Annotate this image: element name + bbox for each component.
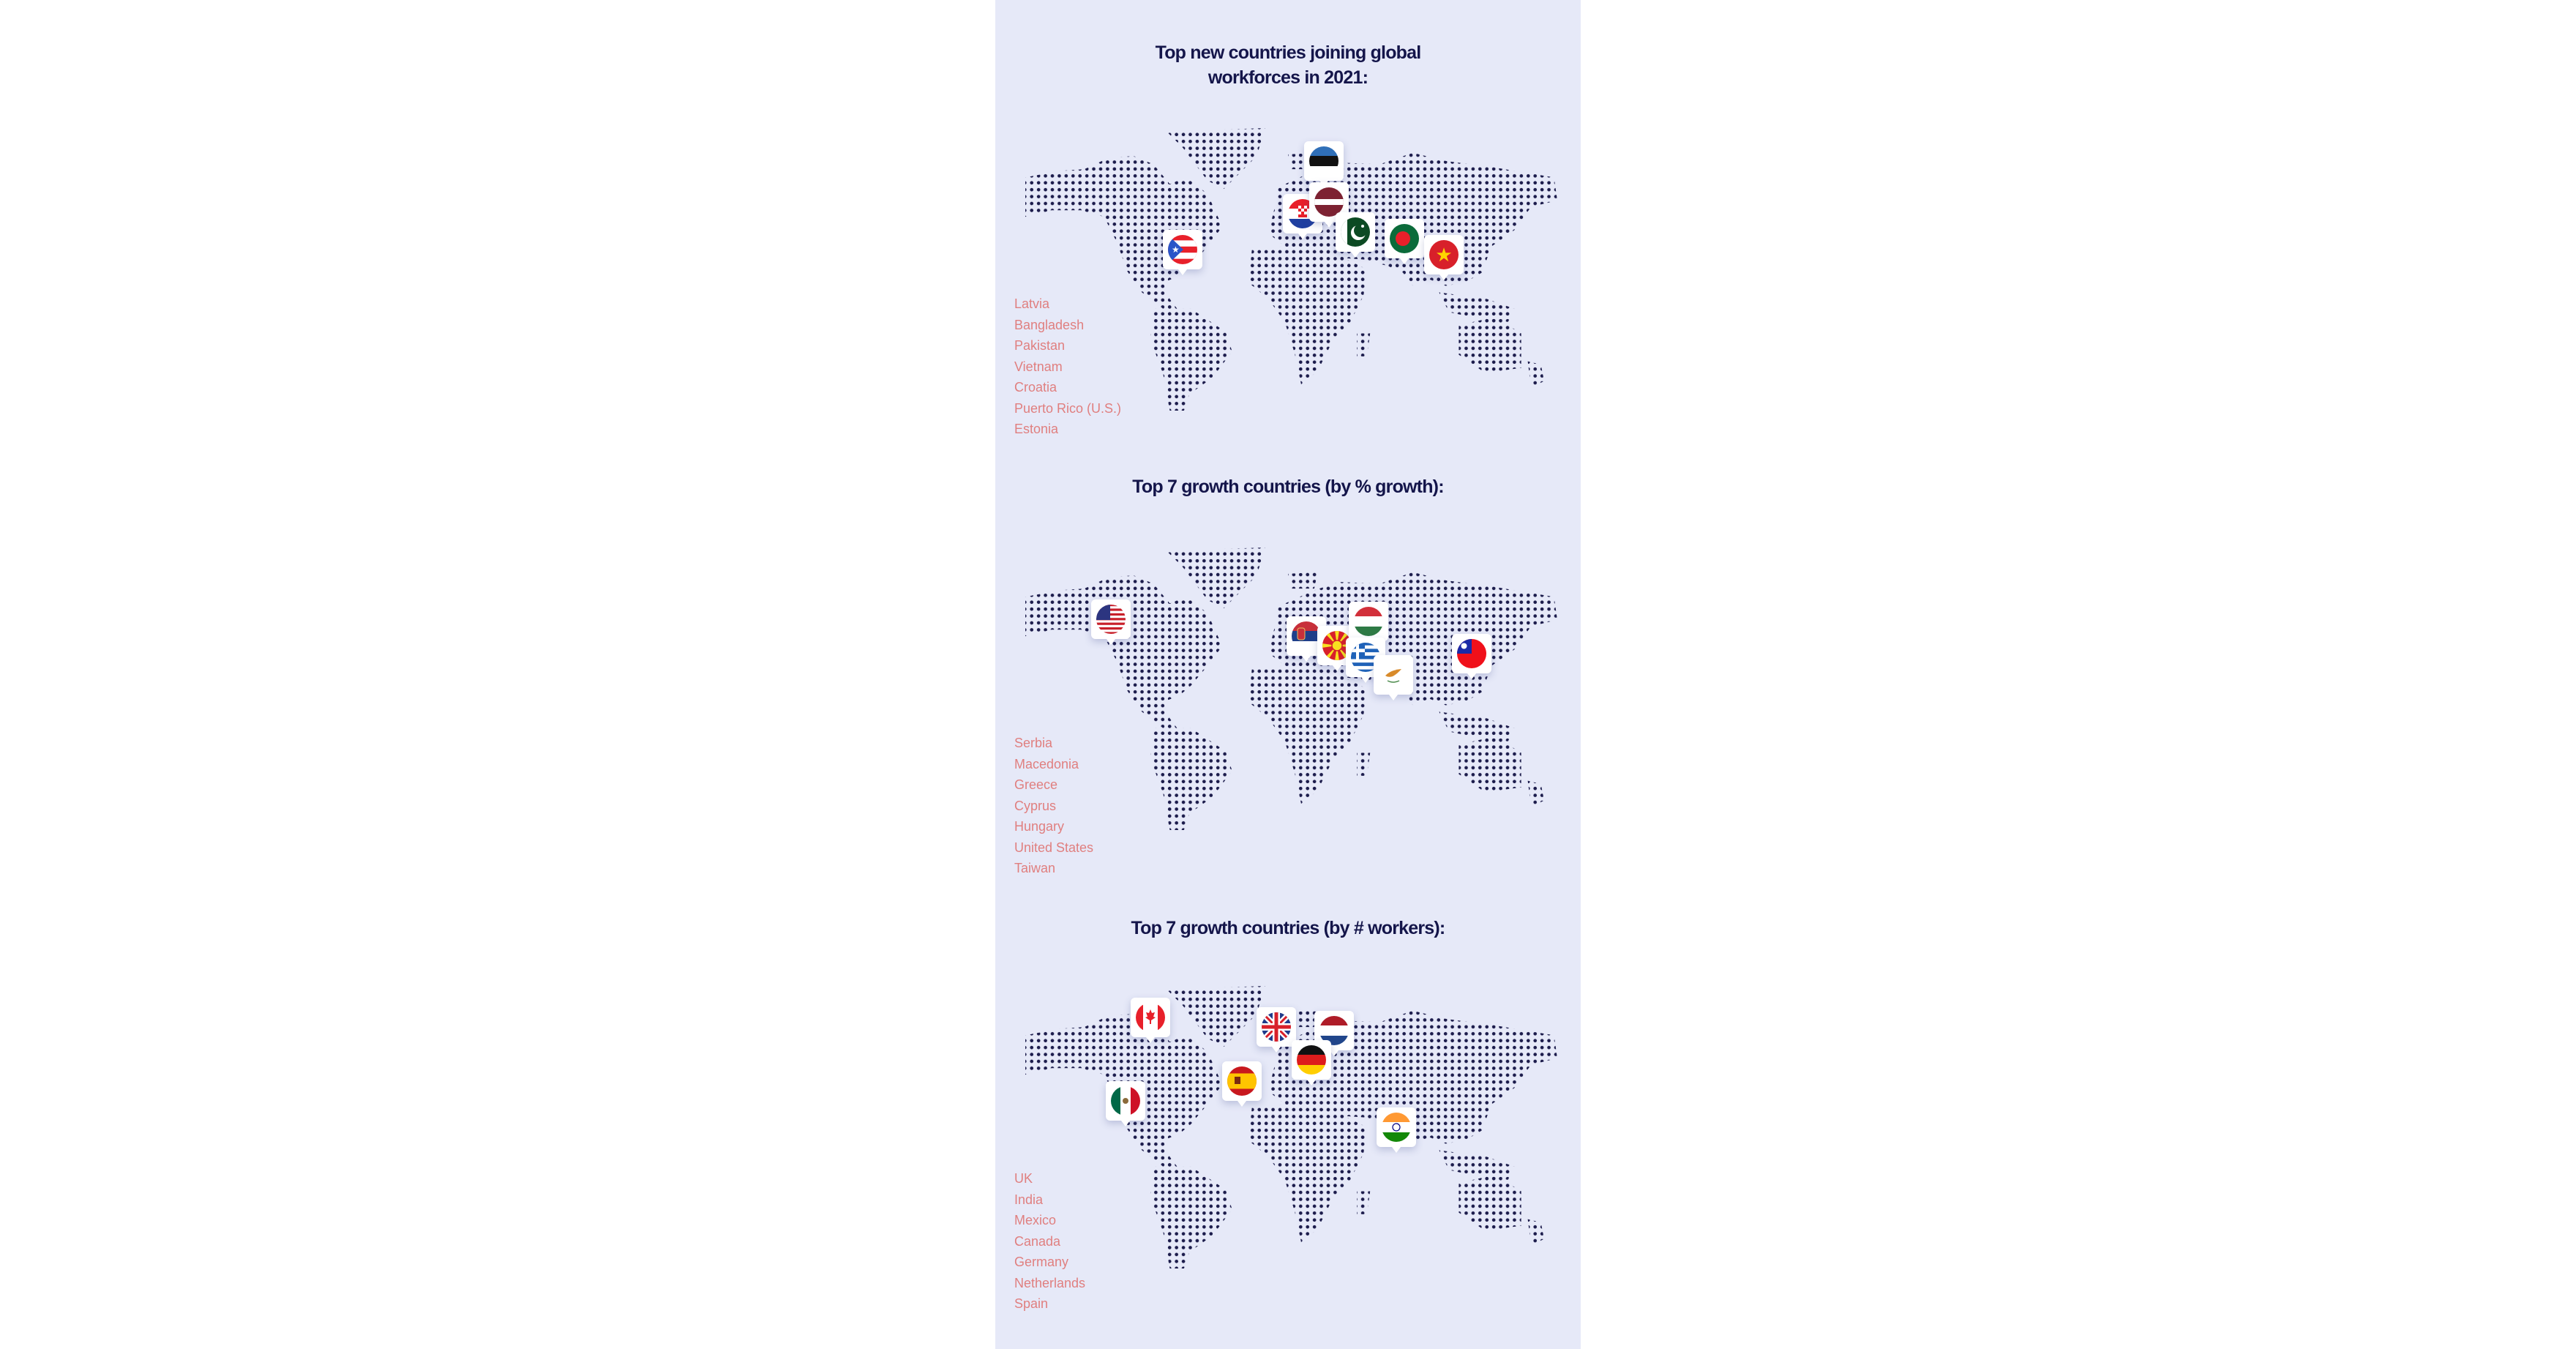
- list: section 3 countries: Germany: [1014, 1255, 1068, 1269]
- list: section 1 countries: Vietnam: [1014, 359, 1063, 373]
- flag: Puerto Rico: [1163, 230, 1202, 269]
- list: section 3 countries: Canada: [1014, 1234, 1060, 1249]
- list: section 2 countries: United States: [1014, 840, 1093, 855]
- list: section 2 countries: Cyprus: [1014, 798, 1056, 812]
- map: section 2: [1025, 548, 1557, 830]
- list: section 1 countries: Bangladesh: [1014, 318, 1084, 332]
- flag: Serbia: [1287, 616, 1326, 656]
- flag: UK: [1257, 1007, 1296, 1047]
- map: section 3: [1025, 986, 1557, 1268]
- flag: Cyprus: [1374, 655, 1413, 695]
- list: section 1 countries: [1014, 296, 1121, 436]
- list: section 2 countries: Greece: [1014, 777, 1057, 792]
- title: section 1: Top new countries joining global: [1156, 42, 1420, 63]
- flag: Taiwan: [1452, 634, 1491, 673]
- list: section 1 countries: Pakistan: [1014, 338, 1065, 353]
- flag: Hungary: [1349, 602, 1388, 641]
- list: section 1 countries: Croatia: [1014, 380, 1057, 395]
- flag: Vietnam: [1424, 235, 1464, 274]
- list: section 2 countries: Serbia: [1014, 736, 1052, 750]
- flag: Pakistan: [1336, 212, 1375, 252]
- flag: India: [1377, 1107, 1416, 1147]
- title: section 1: [1155, 42, 1420, 88]
- flag: Latvia: [1309, 182, 1349, 222]
- flag: Bangladesh: [1385, 219, 1424, 258]
- flag: Macedonia: [1317, 626, 1357, 665]
- list: section 3 countries: Spain: [1014, 1296, 1048, 1311]
- list: section 1 countries: Latvia: [1014, 296, 1049, 311]
- list: section 3 countries: [1014, 1171, 1085, 1311]
- list: section 3 countries: India: [1014, 1192, 1043, 1206]
- title: section 3: Top 7 growth countries (by # workers):: [1131, 918, 1445, 938]
- flag: Croatia: [1283, 194, 1322, 233]
- list: section 1 countries: Estonia: [1014, 422, 1058, 436]
- flag: Spain: [1222, 1061, 1262, 1101]
- title: section 2: Top 7 growth countries (by % growth):: [1132, 477, 1444, 497]
- list: section 2 countries: [1014, 736, 1093, 875]
- flag: Mexico: [1106, 1081, 1145, 1121]
- list: section 2 countries: Taiwan: [1014, 861, 1055, 875]
- title: section 1: workforces in 2021:: [1208, 67, 1368, 88]
- flag: Netherlands: [1314, 1011, 1354, 1050]
- list: section 2 countries: Hungary: [1014, 819, 1064, 834]
- map: section 1: [1025, 128, 1557, 411]
- background panel: [995, 0, 1581, 1349]
- list: section 3 countries: Mexico: [1014, 1213, 1056, 1227]
- flag: Estonia: [1304, 141, 1344, 181]
- list: section 1 countries: Puerto Rico (U.S.): [1014, 401, 1121, 416]
- flag: Germany: [1292, 1040, 1331, 1080]
- flag: Canada: [1131, 998, 1170, 1037]
- list: section 2 countries: Macedonia: [1014, 757, 1079, 771]
- flag: Vietnam: ★: [1435, 244, 1453, 266]
- flag: United States: [1091, 599, 1131, 639]
- list: section 3 countries: UK: [1014, 1171, 1033, 1186]
- list: section 3 countries: Netherlands: [1014, 1275, 1085, 1290]
- flag: Puerto Rico: ★: [1172, 244, 1180, 255]
- flag: Greece: [1346, 638, 1385, 677]
